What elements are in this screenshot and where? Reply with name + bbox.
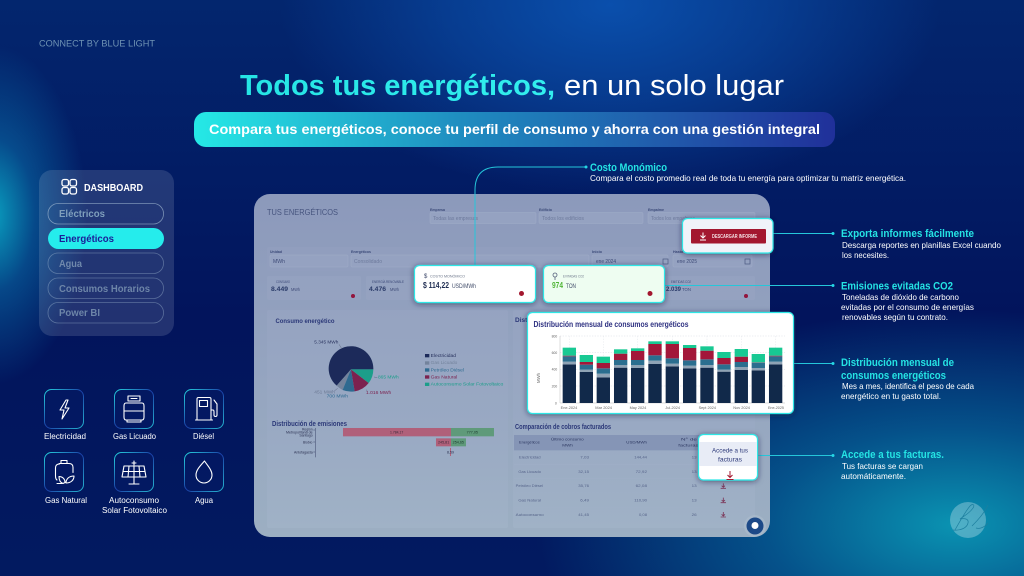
nav: Eléctricos bbox=[48, 204, 164, 224]
callout: emisiones evitadas bbox=[841, 280, 974, 322]
nav: Power BI bbox=[48, 302, 164, 323]
billing table: Autoconsumo bbox=[516, 513, 544, 517]
nav: Consumos Horarios: Consumos Horarios bbox=[59, 284, 150, 295]
emissions bar chart: Antofagasta bbox=[294, 450, 313, 454]
pie chart: 451 MWh bbox=[314, 389, 335, 394]
pie legend: Gas Natural bbox=[431, 374, 457, 379]
label: Gas Natural: Gas Natural bbox=[45, 496, 87, 505]
filters row 1: Todos los empalmes bbox=[651, 216, 695, 222]
panel: dashboard navigation bbox=[39, 170, 174, 336]
callout: distribución mensual: Distribución mensual de bbox=[841, 357, 954, 369]
billing table: 13 bbox=[692, 470, 697, 474]
callout: distribución mensual: energético en tu gasto total. bbox=[841, 391, 941, 401]
heading: emisiones: Distribución de emisiones bbox=[272, 421, 347, 428]
emissions bar chart: Santiago bbox=[299, 434, 313, 438]
highlight: chart card bbox=[528, 312, 794, 414]
label: Electricidad: Electricidad bbox=[44, 432, 86, 441]
billing table: 41,45 bbox=[578, 513, 589, 517]
KPI: energía renovable bbox=[366, 276, 426, 300]
billing table: 144,44 bbox=[634, 456, 648, 460]
pie chart: 865 MWh bbox=[378, 375, 399, 380]
highlight: emisiones evitadas bbox=[544, 266, 664, 302]
highlight: facturas: Accede a tus bbox=[712, 448, 749, 454]
label: Diésel: Diésel bbox=[193, 432, 214, 441]
billing table: facturas bbox=[678, 443, 698, 447]
label: Autoconsumo Solar Fotovoltaico bbox=[102, 496, 168, 515]
stacked bar chart: Jul-2024 bbox=[665, 406, 680, 410]
filters row 2: ene 2024 bbox=[596, 259, 616, 265]
KPI: emisiones CO2: 2.039 bbox=[666, 287, 682, 293]
callout: exporta informes: Descarga reportes en planillas Excel cuando bbox=[842, 240, 1001, 250]
filters row 1: Todas las empresas bbox=[433, 216, 478, 222]
callout: distribución mensual: Mes a mes, identifica el peso de cada bbox=[842, 381, 974, 391]
nav: Eléctricos: Eléctricos bbox=[59, 209, 105, 220]
emissions bar chart: Región bbox=[302, 428, 313, 432]
emissions bar chart: 777,05 bbox=[467, 431, 478, 435]
billing table: Petróleo Diésel bbox=[516, 484, 543, 488]
highlight: facturas bbox=[698, 434, 758, 480]
billing table: Electricidad bbox=[519, 456, 541, 460]
highlight: emisiones evitadas: EVITADAS CO2 bbox=[563, 274, 585, 278]
billing table: 72,92 bbox=[636, 470, 647, 474]
stacked bar chart: Nov 2024 bbox=[733, 406, 750, 410]
filters row 2: Inicio bbox=[592, 249, 603, 254]
callout: accede a facturas: automáticamente. bbox=[841, 471, 906, 481]
pie chart: 700 MWh bbox=[327, 394, 348, 399]
billing table: 26 bbox=[692, 513, 697, 517]
icon: liquefied gas bbox=[114, 390, 154, 428]
filters row 2: Energéticos bbox=[351, 249, 372, 254]
emissions bar chart: 245,81 bbox=[438, 441, 449, 445]
emissions bar chart: Metropolitana de bbox=[286, 431, 313, 435]
nav: Agua: Agua bbox=[59, 259, 82, 270]
filters row 1 bbox=[430, 207, 755, 224]
panel: comparación de cobros: Dist bbox=[515, 317, 528, 324]
billing table: Gas Natural bbox=[518, 498, 541, 502]
KPI: Emisiones: 8.449 bbox=[271, 287, 289, 293]
brand label: CONNECT BY BLUE LIGHT bbox=[39, 38, 155, 50]
stacked bar chart: 200 bbox=[552, 384, 557, 388]
chart title: Distribución mensual de consumos energéticos bbox=[534, 320, 689, 329]
filters row 2: Unidad bbox=[270, 249, 282, 254]
callout: accede a facturas bbox=[841, 449, 944, 481]
stacked bar chart: Mar 2024 bbox=[595, 406, 612, 410]
nav: Agua bbox=[48, 253, 164, 274]
connector dots bbox=[584, 166, 834, 457]
heading: consumo: Consumo energético bbox=[276, 318, 335, 325]
KPI: Emisiones bbox=[267, 276, 361, 300]
callout: exporta informes: Exporta informes fácilmente bbox=[841, 228, 974, 240]
pie chart: 1.016 MWh bbox=[366, 390, 392, 395]
billing table: 32,15 bbox=[578, 470, 589, 474]
billing table: 110,90 bbox=[634, 498, 647, 502]
KPI: emisiones CO2: EMITIDAS CO2 bbox=[671, 279, 692, 284]
nav: Consumos Horarios bbox=[48, 278, 164, 298]
callout: exporta informes bbox=[841, 228, 1001, 260]
highlight: emisiones evitadas: 974 bbox=[552, 281, 563, 290]
logo: Blue Light bbox=[950, 502, 988, 538]
filters row 1: Todos los edificios bbox=[542, 216, 584, 222]
callout: accede a facturas: Tus facturas se cargan bbox=[842, 461, 923, 471]
billing table: 62,08 bbox=[636, 484, 647, 488]
panel: consumo energético bbox=[267, 310, 508, 528]
billing table: Gas Licuado bbox=[518, 470, 541, 474]
stacked bar chart: 400 bbox=[552, 368, 557, 372]
billing table: Último consumo bbox=[551, 436, 584, 441]
icon: electricity bbox=[44, 390, 84, 428]
pie legend: Petróleo Diésel bbox=[431, 367, 464, 372]
billing table: 13 bbox=[692, 498, 697, 502]
nav: Energéticos active bbox=[48, 228, 164, 249]
stacked bar chart: Sept 2024 bbox=[699, 406, 716, 410]
KPI: Emisiones: MWh bbox=[291, 287, 300, 292]
pie legend bbox=[425, 353, 504, 387]
callout connectors bbox=[475, 167, 833, 456]
callout: emisiones evitadas: Emisiones evitadas CO2 bbox=[841, 280, 953, 292]
highlight: descargar informe: DESCARGAR INFORME bbox=[712, 234, 758, 240]
callout: emisiones evitadas: renovables según tu contrato. bbox=[842, 312, 948, 322]
billing table: 13 bbox=[692, 484, 697, 488]
billing table: USD/MWh bbox=[626, 441, 647, 445]
pie chart bbox=[314, 340, 399, 399]
dashboard heading: TUS ENERGÉTICOS bbox=[267, 207, 338, 217]
stacked bar chart: Ene-2024 bbox=[561, 406, 577, 410]
stacked bar chart: 600 bbox=[552, 351, 557, 355]
filters row 1: Empalme bbox=[648, 207, 665, 212]
subtitle pill bbox=[194, 112, 835, 147]
KPI: emisiones CO2 bbox=[662, 276, 755, 300]
filters row 2: MWh bbox=[273, 259, 285, 265]
billing table: N° de bbox=[681, 437, 697, 441]
highlight: costo monómico: $ bbox=[424, 274, 428, 280]
icon: dashboard grid bbox=[62, 180, 76, 194]
pie legend: Electricidad bbox=[431, 353, 457, 358]
billing table: 7,03 bbox=[580, 456, 589, 460]
icon: solar panels bbox=[114, 452, 154, 492]
panel: comparación de cobros bbox=[513, 310, 755, 528]
title: Todos tus energéticos, bbox=[240, 70, 555, 102]
highlight: facturas: facturas bbox=[718, 456, 743, 464]
pie legend: Autoconsumo Solar Fotovoltaico bbox=[431, 382, 504, 387]
highlight: costo monómico: $ 114,22 bbox=[423, 281, 449, 290]
filters row 2: ene 2025 bbox=[677, 259, 697, 265]
billing table: Energéticos bbox=[519, 441, 540, 445]
emissions bar chart: 1.784,17 bbox=[390, 431, 403, 435]
title bbox=[240, 70, 784, 102]
filters row 2 bbox=[267, 247, 755, 271]
highlight: costo monómico: COSTO MONÓMICO bbox=[430, 274, 465, 278]
pie chart: 5.345 MWh bbox=[314, 340, 339, 345]
billing table: 35,76 bbox=[578, 484, 589, 488]
callout: exporta informes: los necesites. bbox=[842, 250, 889, 260]
highlight: costo monómico: USD/MWh bbox=[452, 284, 476, 290]
emissions bar chart bbox=[286, 428, 494, 457]
billing table: 13 bbox=[692, 456, 697, 460]
icon: water drop bbox=[184, 452, 224, 492]
bars bbox=[563, 341, 782, 403]
KPI: energía renovable: 4.476 bbox=[369, 287, 387, 293]
billing table: MWh bbox=[562, 443, 573, 447]
KPI: emisiones CO2: TON bbox=[682, 287, 691, 292]
icon grid: energy types bbox=[44, 390, 224, 515]
emissions bar chart: 254,65 bbox=[453, 441, 464, 445]
stacked bar chart: 0 bbox=[555, 401, 557, 405]
nav: Energéticos active: Energéticos bbox=[59, 234, 114, 245]
filters row 1: Edificio bbox=[539, 207, 552, 212]
callout: costo monómico: Costo Monómico bbox=[590, 162, 667, 174]
stacked bar chart: Ene-2025 bbox=[768, 406, 784, 410]
filters row 2: Hasta bbox=[673, 249, 684, 254]
dashboard heading: DASHBOARD bbox=[84, 183, 143, 194]
button: chat bbox=[744, 515, 766, 537]
pie legend: Gas Licuado bbox=[431, 360, 458, 365]
heading: comparación: Comparación de cobros facturados bbox=[515, 424, 611, 431]
callout: accede a facturas: Accede a tus facturas. bbox=[841, 449, 944, 461]
title: en un solo lugar bbox=[564, 70, 784, 102]
KPI: Emisiones: CONSUMO bbox=[276, 279, 290, 284]
billing table: 0,08 bbox=[639, 513, 647, 517]
filters row 1: Empresa bbox=[430, 207, 446, 212]
callout: costo monómico: Compara el costo promedio real de toda tu energía para optimizar tu matriz energética. bbox=[590, 173, 906, 183]
stacked bar chart: May 2024 bbox=[630, 406, 646, 410]
callout: distribución mensual bbox=[841, 357, 974, 401]
label: Gas Licuado: Gas Licuado bbox=[113, 432, 157, 441]
nav: Power BI: Power BI bbox=[59, 308, 100, 319]
highlight: emisiones evitadas: TON bbox=[566, 284, 576, 290]
subtitle pill: Compara tus energéticos, conoce tu perfil de consumo y ahorra con una gestión integral bbox=[209, 121, 820, 137]
label: Autoconsumo Solar Fotovoltaico: Autoconsumo bbox=[109, 496, 160, 505]
billing table: 6,49 bbox=[580, 498, 589, 502]
callout: emisiones evitadas: Toneladas de dióxido de carbono bbox=[842, 292, 959, 302]
stacked bar chart: 800 bbox=[552, 334, 557, 338]
stacked bar chart bbox=[536, 334, 785, 410]
icon: natural gas bbox=[44, 452, 84, 492]
icon: diesel pump bbox=[184, 390, 224, 428]
callout: distribución mensual: consumos energéticos bbox=[841, 370, 946, 382]
KPI: energía renovable: MWh bbox=[390, 287, 399, 292]
callout: emisiones evitadas: evitadas por el consumo de energías bbox=[841, 302, 974, 312]
stacked bar chart: MWh bbox=[536, 372, 541, 383]
label: Agua: Agua bbox=[195, 496, 214, 505]
emissions bar chart: 8,59 bbox=[447, 451, 454, 455]
KPI: energía renovable: ENERGÍA RENOVABLE bbox=[372, 279, 404, 284]
label: Autoconsumo Solar Fotovoltaico: Solar Fotovoltaico bbox=[102, 506, 168, 515]
panel: dashboard screenshot bbox=[254, 194, 770, 537]
highlight: descargar informe bbox=[682, 218, 773, 253]
billing table bbox=[514, 435, 734, 517]
callout: costo monómico bbox=[590, 162, 906, 183]
filters row 2: Consolidado bbox=[354, 259, 382, 265]
emissions bar chart: Biobío bbox=[303, 440, 312, 444]
highlight: costo monómico bbox=[414, 266, 536, 302]
